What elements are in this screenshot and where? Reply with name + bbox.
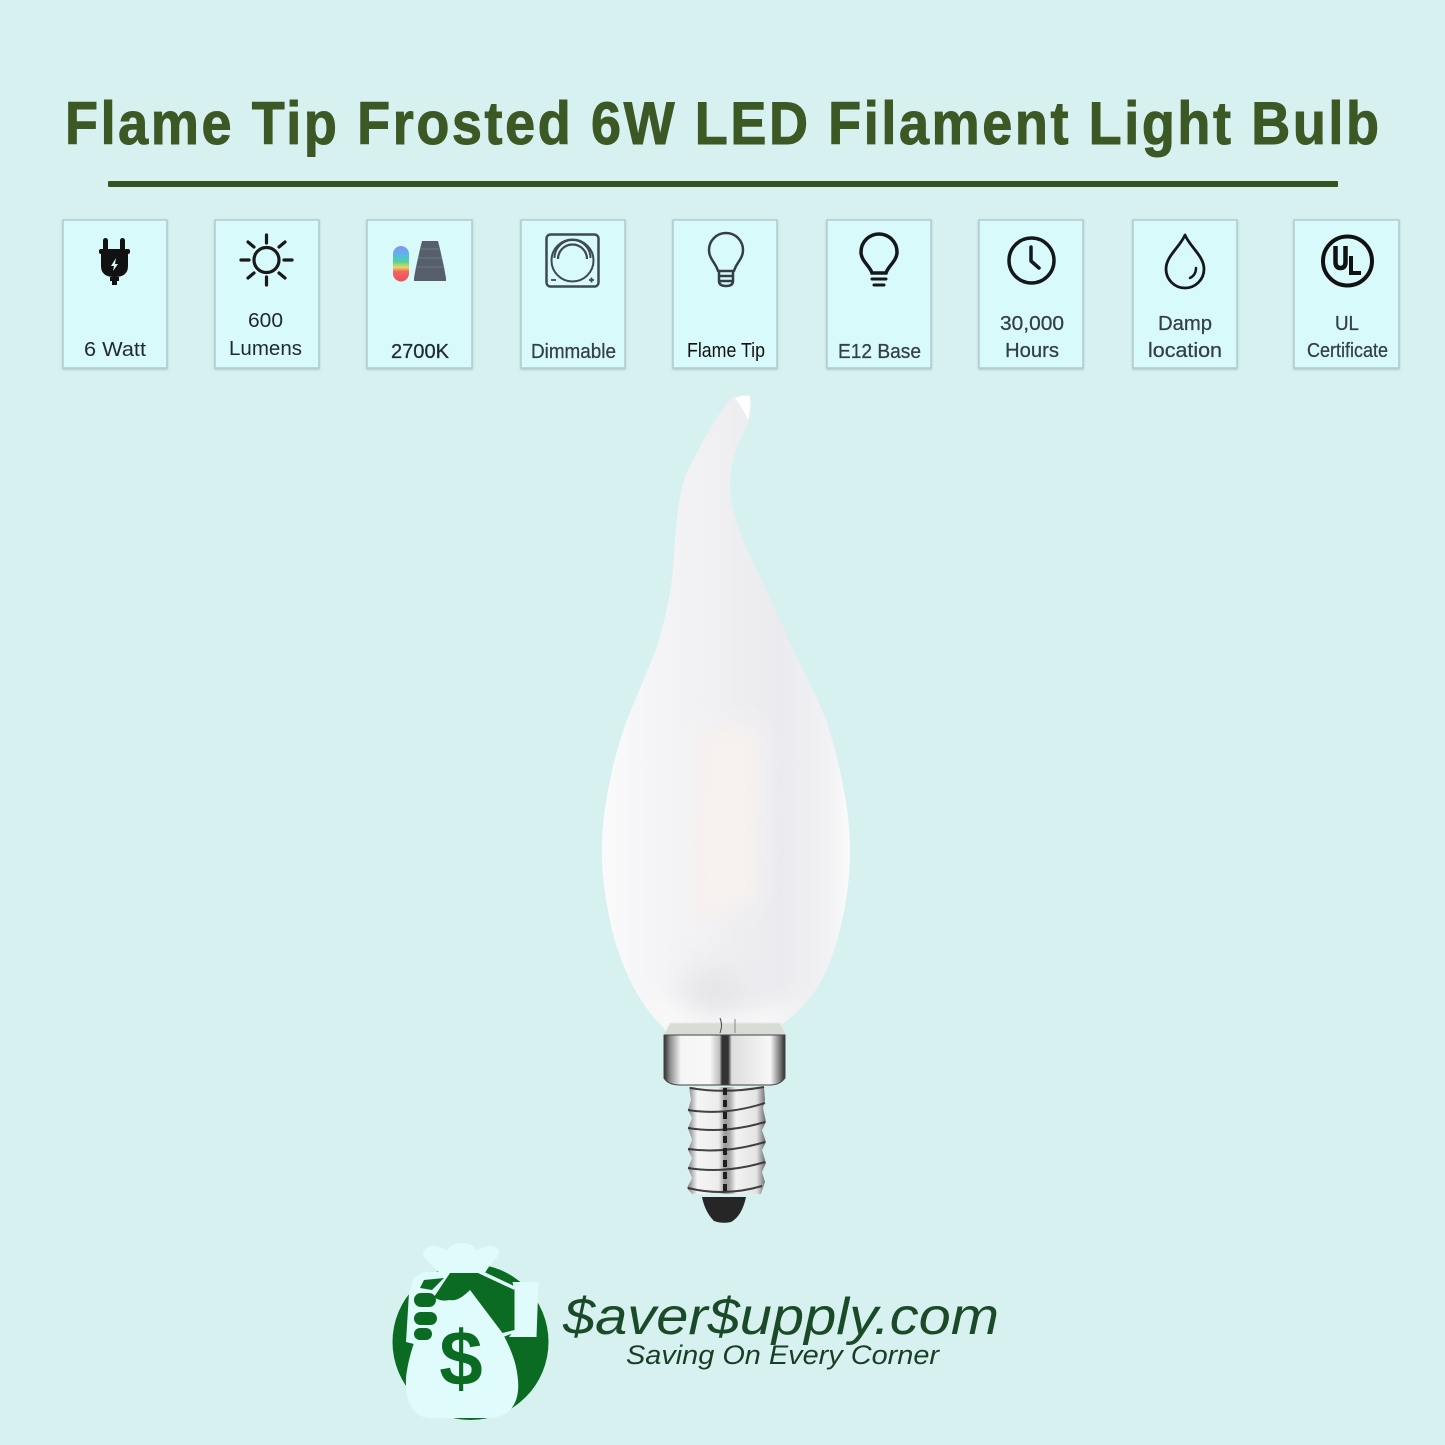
logo tagline: Saving On Every Corner xyxy=(626,1340,940,1370)
icon: dimmer dial xyxy=(546,234,598,286)
logo money bag xyxy=(406,1243,518,1418)
logo hand xyxy=(406,1270,538,1344)
feature card: 600 Lumens: 600 xyxy=(248,310,283,332)
feature card: E12 Base xyxy=(827,220,931,368)
feature card: Flame Tip xyxy=(673,220,777,368)
feature card: Dimmable xyxy=(521,220,625,368)
screw base xyxy=(687,1087,766,1195)
icon: sun xyxy=(241,235,292,285)
product: frosted flame tip bulb xyxy=(602,395,850,1223)
icon: colour temperature xyxy=(393,241,446,282)
feature card: UL Certificate: Certificate xyxy=(1307,340,1388,362)
collar xyxy=(664,1035,785,1085)
feature card: 6 Watt xyxy=(63,220,167,368)
logo dollar sign: $ xyxy=(439,1314,483,1402)
feature card: Damp location: location xyxy=(1148,340,1222,362)
bulb neck highlight xyxy=(696,978,782,1022)
logo circle xyxy=(392,1264,548,1420)
feature card: 2700K xyxy=(367,220,472,368)
title underline xyxy=(108,181,1338,187)
feature card: 30,000 Hours: 30,000 xyxy=(1000,313,1064,335)
bulb inner shading xyxy=(727,736,752,898)
feature card: Dimmable: Dimmable xyxy=(531,341,616,363)
feature card: UL Certificate: UL xyxy=(1335,313,1359,335)
stem inside neck xyxy=(664,1018,786,1035)
icon: plug xyxy=(99,238,130,285)
feature card: 30,000 Hours: Hours xyxy=(1005,340,1059,362)
feature card: 600 Lumens xyxy=(215,220,319,368)
bulb filament glow xyxy=(727,736,752,898)
feature card: Damp location xyxy=(1133,220,1237,368)
contact tip xyxy=(702,1197,746,1223)
feature card: E12 Base: E12 Base xyxy=(838,341,921,363)
icon: bold bulb xyxy=(861,234,897,285)
feature card: 2700K: 2700K xyxy=(391,341,450,363)
feature card: Flame Tip: Flame Tip xyxy=(687,340,765,362)
feature card: Damp location: Damp xyxy=(1158,313,1212,335)
feature card: UL Certificate xyxy=(1294,220,1399,368)
bulb glass xyxy=(602,395,850,1034)
icon: outline bulb xyxy=(709,233,743,286)
icon: UL mark xyxy=(1323,236,1372,286)
feature card: 6 Watt: 6 Watt xyxy=(84,339,146,361)
icon: water drop xyxy=(1166,235,1204,288)
logo: SaverSupply xyxy=(392,1243,999,1420)
feature card: 600 Lumens: Lumens xyxy=(229,338,302,360)
bulb tip highlight xyxy=(735,396,750,420)
feature card: 30,000 Hours xyxy=(979,220,1083,368)
title: Flame Tip Frosted 6W LED Filament Light Bulb xyxy=(65,90,1379,158)
icon: clock xyxy=(1009,238,1054,283)
logo wordmark: $aver$upply.com xyxy=(562,1288,999,1346)
